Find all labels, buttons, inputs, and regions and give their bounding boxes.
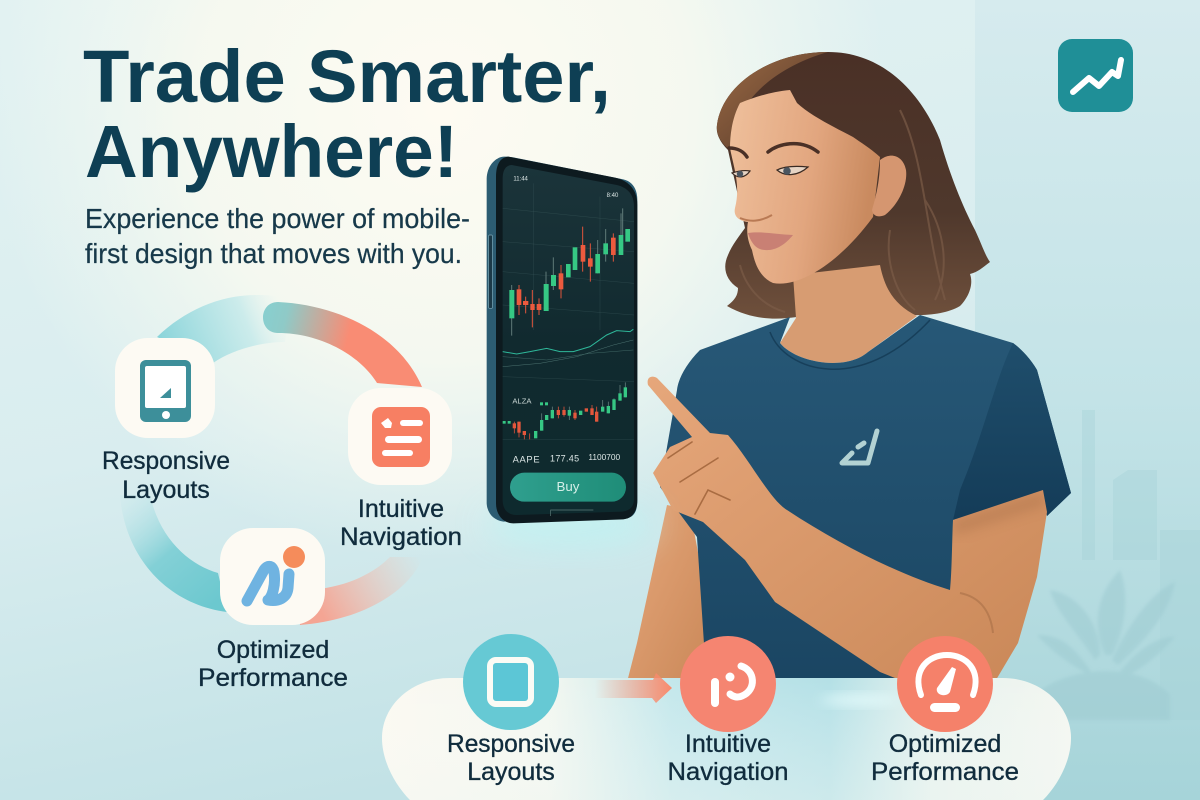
subtitle: [85, 203, 470, 269]
icon: gauge circle: [897, 636, 993, 732]
ear: [872, 156, 906, 216]
arc: coral bottom: [300, 557, 423, 625]
icon: tablet circle: [463, 634, 559, 730]
label: responsive layouts: [102, 447, 230, 504]
arrow: [595, 673, 672, 703]
label: responsive layouts: [447, 730, 575, 786]
sleeve shade: [953, 343, 1071, 520]
phone bezel: [496, 157, 637, 523]
subtitle: Experience the power of mobile-: [85, 203, 470, 234]
status text: [513, 177, 619, 199]
hair strands: [740, 110, 945, 312]
hair: [717, 52, 990, 319]
title: Anywhere!: [85, 110, 458, 193]
icon: list: [372, 407, 430, 467]
arm shading: [953, 498, 1045, 633]
upper candlestick chart: [509, 208, 630, 336]
phone: [487, 157, 637, 523]
label: intuitive navigation: Navigation: [668, 758, 788, 786]
subtitle: first design that moves with you.: [85, 238, 462, 269]
shirt logo: [842, 431, 877, 463]
eyes: [732, 166, 808, 177]
label: responsive layouts: Layouts: [122, 476, 210, 504]
buy button: [510, 473, 626, 502]
label: intuitive navigation: [668, 730, 788, 786]
label: responsive layouts: Responsive: [447, 730, 575, 758]
label: optimized performance: [198, 636, 348, 692]
title: [83, 35, 611, 193]
bar background: [382, 678, 1071, 800]
icon: tablet: [140, 360, 191, 422]
neck: [780, 265, 917, 363]
ticker label: ALZA: [512, 396, 532, 405]
label: optimized performance: Performance: [871, 758, 1019, 786]
card: responsive layouts: [115, 338, 215, 438]
ticker row: 177.45: [550, 454, 579, 464]
line chart: [503, 329, 633, 367]
phone body: [487, 157, 637, 522]
arc: teal top: [157, 295, 290, 363]
cycle diagram: [102, 295, 462, 692]
label: intuitive navigation: Intuitive: [358, 495, 444, 523]
arc: coral top: [263, 302, 422, 387]
eyebrows: [729, 144, 818, 157]
label: optimized performance: Performance: [198, 664, 348, 692]
hair highlight: [717, 52, 828, 150]
phone screen: [503, 165, 634, 515]
left arm: [625, 505, 712, 690]
card: intuitive navigation: [348, 388, 452, 485]
label: optimized performance: Optimized: [889, 730, 1001, 758]
ticker row: 1100700: [588, 452, 621, 462]
lips: [748, 232, 793, 250]
ticker row: [513, 452, 621, 464]
status text: 8:40: [607, 193, 619, 199]
logo badge: [1058, 39, 1133, 112]
label: optimized performance: Optimized: [217, 636, 329, 664]
label: optimized performance: [871, 730, 1019, 786]
label: responsive layouts: Responsive: [102, 447, 230, 475]
status text: 11:44: [513, 177, 529, 183]
background plant: [1030, 570, 1175, 720]
arc: teal bottom: [120, 495, 227, 612]
face: [730, 90, 880, 284]
woman with pointing hand: [625, 52, 1071, 690]
bottom feature bar: [382, 634, 1071, 800]
buy button: Buy: [557, 479, 580, 494]
lower candlestick chart: [503, 382, 627, 439]
side button: [489, 235, 492, 308]
label: intuitive navigation: Navigation: [340, 523, 462, 551]
label: responsive layouts: Layouts: [467, 758, 555, 786]
title: Trade Smarter,: [83, 35, 611, 118]
home indicator: [551, 510, 593, 516]
card: optimized performance: [220, 528, 325, 625]
icon: performance mark: [247, 546, 305, 601]
shirt: [660, 315, 1071, 690]
nose shadow: [740, 215, 772, 221]
right arm and hand: [648, 377, 1047, 690]
finger lines: [668, 442, 730, 514]
shirt collar: [770, 320, 930, 369]
label: intuitive navigation: [340, 495, 462, 551]
icon: navigation circle: [680, 636, 776, 732]
ticker row: AAPE: [513, 454, 540, 464]
label: intuitive navigation: Intuitive: [685, 730, 771, 758]
phone glow: [485, 503, 655, 547]
grid lines: [503, 183, 634, 439]
